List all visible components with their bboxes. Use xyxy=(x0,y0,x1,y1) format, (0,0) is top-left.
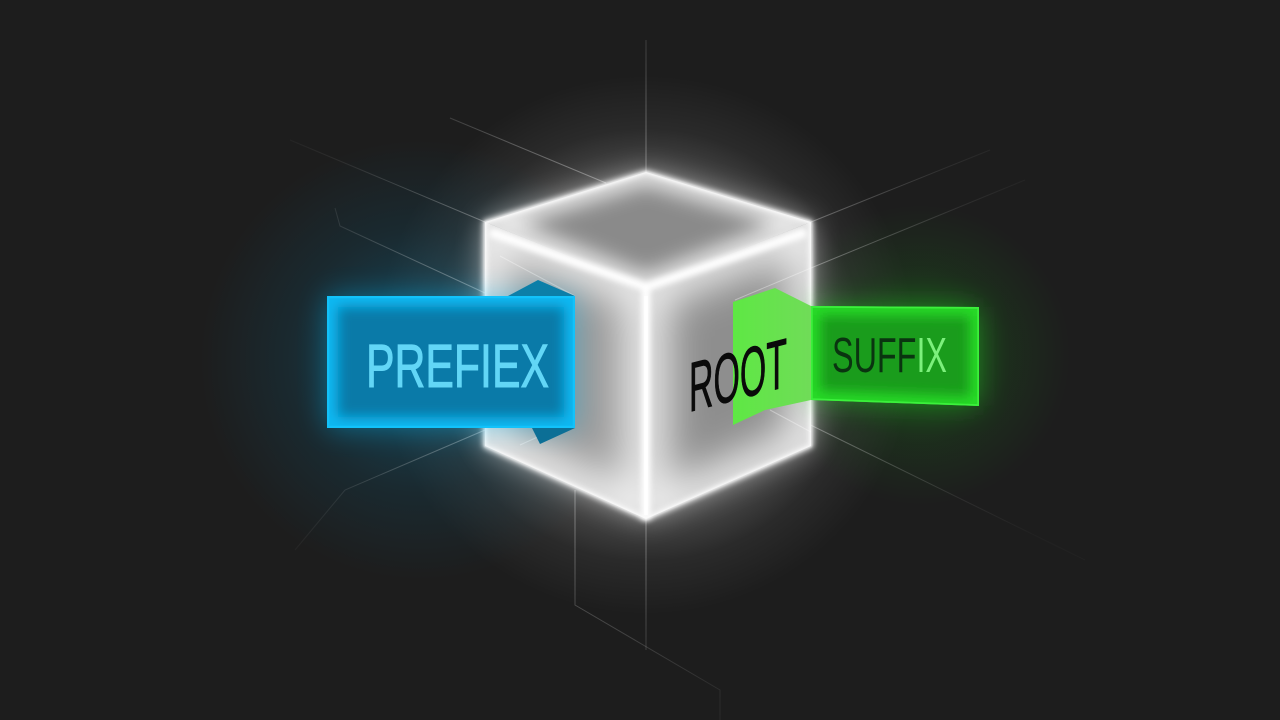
cube right face xyxy=(646,222,811,519)
cube top face xyxy=(485,172,811,287)
prefix tabs behind panel xyxy=(508,280,575,296)
suffix panel body xyxy=(811,306,979,406)
prefix panel body xyxy=(327,296,575,428)
infographic: word structure cube xyxy=(238,40,1038,720)
cube glowing edges xyxy=(485,172,811,519)
panel: suffix xyxy=(811,306,979,406)
panel: root tab xyxy=(689,288,811,428)
suffix label: SUFFIX xyxy=(832,329,947,383)
prefix label: PREFIEX xyxy=(366,332,549,400)
cube xyxy=(485,172,811,519)
inner cube faint lines xyxy=(500,256,811,445)
panel: prefix xyxy=(327,280,575,444)
cube left face xyxy=(485,222,646,519)
root tab body xyxy=(733,288,811,425)
suffix glow xyxy=(811,306,979,406)
cube outer glow xyxy=(485,172,811,519)
panel: root tab: ROOT xyxy=(689,325,787,428)
prefix glow xyxy=(327,296,575,428)
connecting circuit lines xyxy=(290,40,1085,720)
